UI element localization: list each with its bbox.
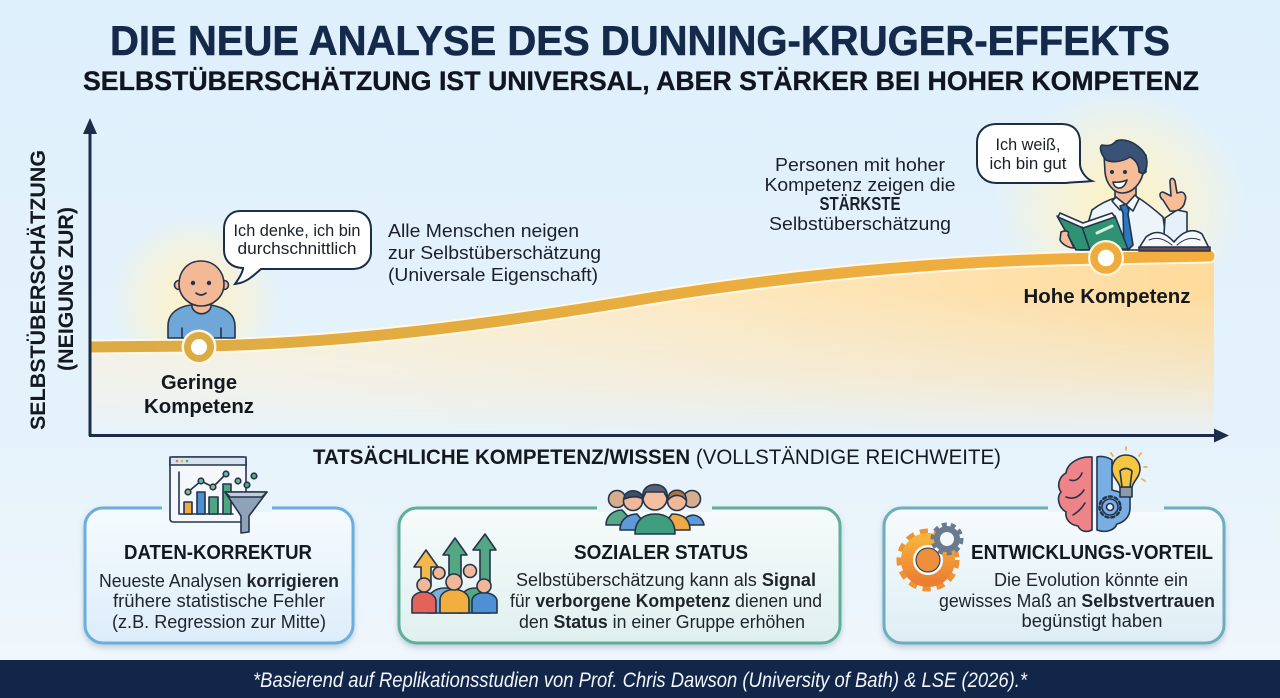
- x axis: [89, 428, 1229, 442]
- body text: [99, 571, 339, 632]
- glow: high competence: [995, 90, 1245, 320]
- bubble text: durchschnittlich: [238, 239, 356, 258]
- icon: low competence person: [168, 261, 235, 338]
- annotation: strongest overestimation: Selbstüberschätzung: [769, 213, 951, 234]
- speech bubble: high competence: [977, 124, 1092, 183]
- annotation: strongest overestimation: Kompetenz zeigen die: [764, 174, 956, 195]
- title: DIE NEUE ANALYSE DES DUNNING-KRUGER-EFFEKTS: [110, 17, 1170, 64]
- body text: (z.B. Regression zur Mitte): [112, 612, 326, 632]
- label: low competence: [144, 372, 254, 418]
- bubble text: Ich weiß,: [996, 135, 1060, 154]
- panel: evolutionary advantage: [884, 447, 1224, 643]
- body text: Die Evolution könnte ein: [994, 570, 1188, 590]
- bubble text: ich bin gut: [990, 154, 1067, 173]
- icon: rising arrows and people: [412, 534, 497, 613]
- body text: gewisses Maß an Selbstvertrauen: [939, 591, 1215, 611]
- gap behind icon: [162, 504, 272, 512]
- gap behind icon: [597, 504, 712, 512]
- body text: Neueste Analysen korrigieren: [99, 571, 339, 591]
- annotation: universal trait: (Universale Eigenschaft): [388, 264, 598, 285]
- annotation: strongest overestimation: STÄRKSTE: [820, 193, 900, 214]
- body text: [510, 570, 822, 632]
- chart: [27, 90, 1245, 469]
- annotation: universal trait: zur Selbstüberschätzung: [388, 242, 601, 263]
- subtitle: SELBSTÜBERSCHÄTZUNG IST UNIVERSAL, ABER STÄRKER BEI HOHER KOMPETENZ: [83, 66, 1199, 96]
- annotation: strongest overestimation: [764, 154, 956, 234]
- y axis: [83, 118, 97, 436]
- marker: high competence: [1088, 240, 1124, 276]
- icon: chart and funnel: [170, 457, 267, 533]
- body text: frühere statistische Fehler: [113, 591, 325, 611]
- icon: brain and light bulb: [1059, 447, 1147, 531]
- icon: group of people: [606, 484, 704, 534]
- marker: low competence: [182, 330, 216, 364]
- y axis label: SELBSTÜBERSCHÄTZUNG: [27, 150, 50, 430]
- y axis label: (NEIGUNG ZUR): [55, 207, 78, 371]
- panel: data correction: [85, 457, 353, 643]
- heading: SOZIALER STATUS: [574, 542, 748, 564]
- heading: DATEN-KORREKTUR: [124, 542, 313, 564]
- label: low competence: Geringe: [161, 372, 237, 394]
- annotation: strongest overestimation: Personen mit hoher: [775, 154, 945, 175]
- footer text: *Basierend auf Replikationsstudien von Prof. Chris Dawson (University of Bath) & LSE (2026).*: [253, 669, 1028, 692]
- body text: Selbstüberschätzung kann als Signal: [516, 570, 816, 590]
- icon: high competence person: [1057, 140, 1210, 251]
- annotation: universal trait: [388, 220, 601, 285]
- body text: für verborgene Kompetenz dienen und: [510, 591, 822, 611]
- bubble text: Ich denke, ich bin: [234, 221, 360, 240]
- speech bubble: low competence: [224, 211, 371, 284]
- body text: den Status in einer Gruppe erhöhen: [519, 612, 805, 632]
- label: low competence: Kompetenz: [144, 396, 254, 418]
- annotation: universal trait: Alle Menschen neigen: [388, 220, 579, 241]
- glow: low competence: [110, 215, 280, 385]
- icon: gears: [900, 524, 962, 588]
- body text: [939, 570, 1215, 631]
- bubble text: [234, 221, 360, 258]
- footer: [0, 660, 1280, 698]
- bubble text: [990, 135, 1067, 173]
- y axis label: [27, 150, 78, 430]
- area under curve: [92, 256, 1214, 433]
- x axis label: TATSÄCHLICHE KOMPETENZ/WISSEN (VOLLSTÄNDIGE REICHWEITE): [313, 446, 1001, 469]
- heading: ENTWICKLUNGS-VORTEIL: [971, 542, 1213, 564]
- body text: begünstigt haben: [1022, 611, 1162, 631]
- panel: social status: [399, 484, 840, 643]
- curve line: [85, 256, 1209, 347]
- gap behind icon: [1048, 504, 1164, 512]
- label: high competence: Hohe Kompetenz: [1024, 286, 1190, 308]
